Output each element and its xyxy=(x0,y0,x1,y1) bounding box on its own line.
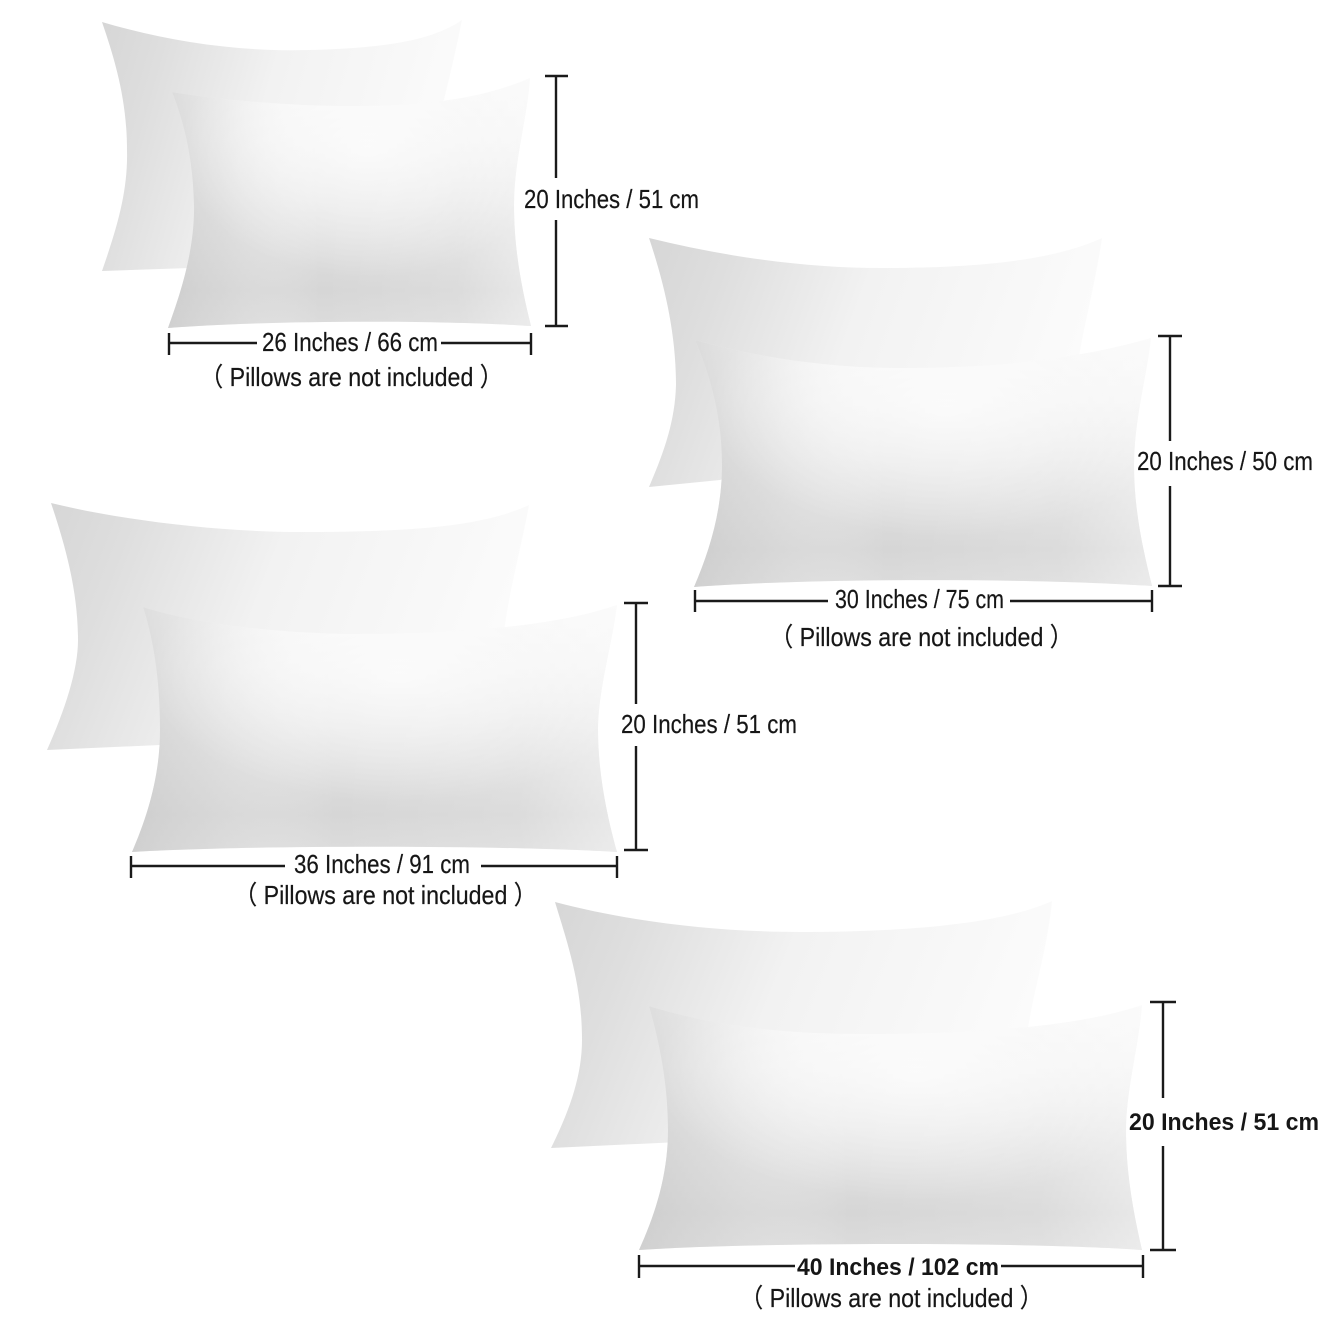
icon: back pillow xyxy=(47,503,529,750)
note: （ Pillows are not included ） xyxy=(740,1283,1043,1313)
icon: back pillow xyxy=(649,238,1102,487)
height dimension line xyxy=(624,603,648,850)
panel: 40 x 20 inch pillow pair xyxy=(551,901,1319,1313)
height label: 20 Inches / 51 cm xyxy=(1129,1109,1319,1136)
panel: 26 x 20 inch pillow pair xyxy=(102,20,699,392)
note: （ Pillows are not included ） xyxy=(200,362,503,392)
icon: front pillow xyxy=(168,78,531,328)
height dimension line xyxy=(1158,336,1182,586)
width dimension line xyxy=(169,333,531,355)
note: （ Pillows are not included ） xyxy=(770,622,1073,652)
icon: front pillow xyxy=(639,1005,1142,1250)
icon: back pillow xyxy=(102,20,462,271)
note: （ Pillows are not included ） xyxy=(234,880,537,910)
icon: front pillow xyxy=(132,605,617,852)
panel: 36 x 20 inch pillow pair xyxy=(47,503,797,910)
height label: 20 Inches / 50 cm xyxy=(1137,446,1313,476)
height label: 20 Inches / 51 cm xyxy=(621,709,797,739)
width dimension line xyxy=(639,1255,1143,1278)
panel: 30 x 20 inch pillow pair xyxy=(649,238,1313,652)
height label: 20 Inches / 51 cm xyxy=(524,184,699,214)
height dimension line xyxy=(545,76,568,326)
height dimension line xyxy=(1150,1002,1176,1250)
width label: 26 Inches / 66 cm xyxy=(262,327,438,357)
width dimension line xyxy=(695,590,1152,612)
width label: 40 Inches / 102 cm xyxy=(797,1254,999,1281)
width dimension line xyxy=(131,856,617,878)
width label: 30 Inches / 75 cm xyxy=(835,584,1004,614)
width label: 36 Inches / 91 cm xyxy=(294,849,470,879)
icon: front pillow xyxy=(694,338,1152,587)
icon: back pillow xyxy=(551,901,1052,1148)
